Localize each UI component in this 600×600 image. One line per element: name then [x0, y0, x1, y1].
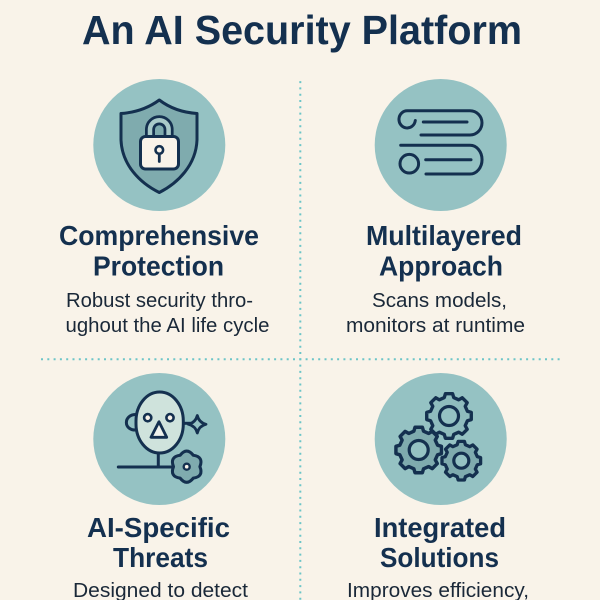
panel: comprehensive protection — [59, 79, 270, 337]
text: comprehensive protection description: Robust security thro- — [66, 290, 253, 312]
heading: AI-specific threats — [87, 512, 230, 573]
panel: integrated solutions — [347, 373, 529, 600]
panel: multilayered approach — [346, 79, 525, 337]
title: An AI Security Platform — [82, 7, 522, 53]
heading: integrated solutions: Solutions — [380, 542, 499, 573]
heading: comprehensive protection: Protection — [93, 250, 224, 282]
heading: comprehensive protection — [59, 220, 259, 282]
icon: three gears — [375, 373, 507, 505]
heading: AI-specific threats: AI-Specific — [87, 512, 230, 543]
heading: multilayered approach — [366, 220, 522, 282]
icon: layered lines — [375, 79, 507, 211]
heading: integrated solutions — [374, 512, 506, 573]
heading: multilayered approach: Approach — [379, 250, 503, 282]
heading: integrated solutions: Integrated — [374, 512, 506, 543]
text: multilayered approach description: monitors at runtime — [346, 315, 525, 337]
text: comprehensive protection description — [66, 290, 270, 337]
heading: comprehensive protection: Comprehensive — [59, 220, 259, 251]
heading: AI-specific threats: Threats — [113, 542, 208, 573]
heading: multilayered approach: Multilayered — [366, 220, 522, 251]
text: multilayered approach description — [346, 290, 525, 337]
icon: AI face with gear — [93, 373, 225, 505]
text: multilayered approach description: Scans models, — [372, 290, 507, 312]
panel: AI-specific threats — [73, 373, 248, 600]
text: comprehensive protection description: ughout the AI life cycle — [66, 315, 270, 337]
icon: shield with padlock — [93, 79, 225, 211]
